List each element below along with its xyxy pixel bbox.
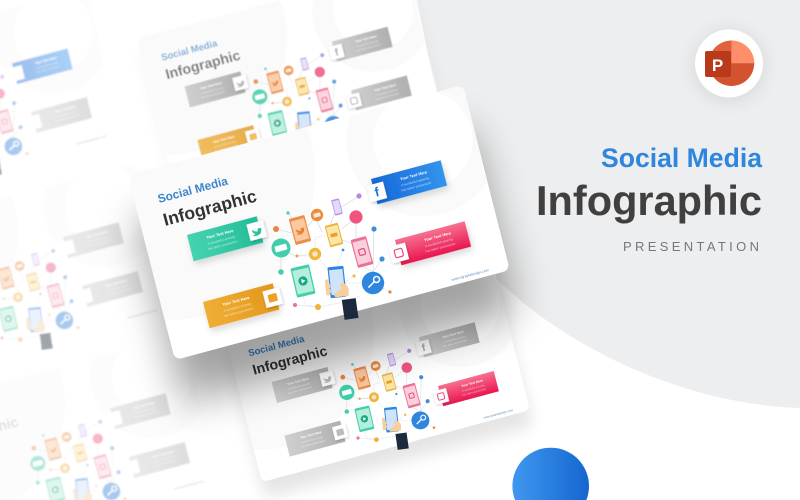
box: facebook: f <box>334 47 340 59</box>
box: twitter: Your Text Here <box>200 81 222 91</box>
box: instagram: A wonderful serenity <box>462 383 485 393</box>
box: instagram <box>387 221 471 267</box>
box: youtube: has taken possession <box>214 143 239 153</box>
box: instagram: has taken possession <box>375 91 400 101</box>
footer url: www.rgraphdesign.com <box>451 268 489 282</box>
box: instagram: has taken possession <box>462 387 487 397</box>
slide: faded top left: has taken possession <box>36 64 61 74</box>
box: facebook <box>327 27 393 63</box>
box: twitter <box>185 70 250 107</box>
box: youtube <box>284 420 349 457</box>
box: youtube: has taken possession <box>223 306 254 318</box>
box: facebook: has taken possession <box>443 338 468 348</box>
box: facebook: has taken possession <box>401 181 432 193</box>
slide: faded middle left: Your Text Here <box>105 278 128 288</box>
slide: faded middle left: has taken possession <box>87 238 112 248</box>
slide: faded bottom left: has taken possession <box>153 458 178 468</box>
title: social media: Social Media <box>601 143 762 173</box>
box: twitter: Your Text Here <box>287 376 309 386</box>
slide: faded bottom left: has taken possession <box>134 409 159 419</box>
slide: faded middle left: A wonderful serenity <box>106 283 129 293</box>
box: twitter <box>187 215 268 261</box>
box: instagram: Your Text Here <box>423 230 452 242</box>
box: youtube: has taken possession <box>301 438 326 449</box>
box: twitter: A wonderful serenity <box>207 235 236 246</box>
box: facebook: has taken possession <box>356 42 381 53</box>
box: instagram <box>345 75 412 112</box>
slide: faded top left: A wonderful serenity <box>55 109 78 119</box>
network of phones and icons <box>272 193 392 320</box>
box: instagram: A wonderful serenity <box>375 87 398 97</box>
slide: faded middle left: has taken possession <box>106 287 131 297</box>
box: instagram: Your Text Here <box>374 83 397 93</box>
slide: faded bottom left: A wonderful serenity <box>153 454 176 464</box>
box: youtube: Your Text Here <box>299 430 322 440</box>
main slide <box>25 30 510 360</box>
heading: Social Media <box>160 38 219 64</box>
box: instagram: A wonderful serenity <box>425 237 454 248</box>
box: twitter: A wonderful serenity <box>288 381 311 391</box>
slide: faded bottom left: A wonderful serenity <box>133 405 157 415</box>
slide: faded middle left: www.rgraphdesign.com <box>127 308 158 320</box>
box: facebook <box>414 322 480 359</box>
slide: faded bottom left: Your Text Here <box>152 449 175 459</box>
title: infographic: Infographic <box>536 177 762 224</box>
box: instagram: has taken possession <box>425 242 456 254</box>
heading: Infographic <box>161 186 259 230</box>
box: instagram <box>432 371 499 408</box>
box: youtube: A wonderful serenity <box>300 435 324 445</box>
slide: faded top left <box>0 0 123 208</box>
box: facebook: A wonderful serenity <box>401 176 430 187</box>
slide: lower <box>142 218 533 498</box>
box: youtube: A wonderful serenity <box>223 302 252 313</box>
box: facebook: A wonderful serenity <box>355 38 379 48</box>
slide shadow <box>141 0 446 198</box>
box: facebook <box>365 160 447 206</box>
box: youtube <box>203 282 284 328</box>
box: facebook: f <box>421 343 427 354</box>
box: youtube: Your Text Here <box>222 295 251 307</box>
box: youtube: A wonderful serenity <box>213 139 237 149</box>
slide: faded middle left <box>0 118 174 382</box>
heading: Infographic <box>164 47 242 82</box>
slide: faded bottom left <box>0 289 221 500</box>
box: twitter: has taken possession <box>207 239 238 251</box>
slide: faded bottom left: www.rgraphdesign.com <box>174 479 205 491</box>
box: facebook: Your Text Here <box>355 34 377 44</box>
box: instagram: Your Text Here <box>461 378 484 388</box>
slide shadow <box>228 278 533 498</box>
box: twitter <box>272 366 337 403</box>
box: facebook: Your Text Here <box>442 330 464 339</box>
box: twitter: Your Text Here <box>206 228 235 240</box>
heading: Social Media <box>156 174 230 206</box>
heading: Infographic <box>251 342 329 378</box>
slide: faded top left: Your Text Here <box>35 56 57 65</box>
box: youtube: Your Text Here <box>212 134 235 144</box>
box: twitter: has taken possession <box>201 89 226 99</box>
slide: faded middle left: A wonderful serenity <box>86 234 110 244</box>
slide: faded top left: A wonderful serenity <box>35 60 59 70</box>
slide: faded middle left: Your Text Here <box>86 230 108 239</box>
box: twitter: has taken possession <box>288 385 313 395</box>
slide: faded bottom left: Your Text Here <box>133 401 155 410</box>
decorative blue circle <box>512 448 589 500</box>
slide: faded top left: has taken possession <box>55 113 80 123</box>
slide: faded top left: Your Text Here <box>54 104 77 114</box>
subtitle: PRESENTATION <box>623 239 759 254</box>
background grey shape <box>417 0 800 408</box>
slide: faded top left: www.rgraphdesign.com <box>76 134 107 146</box>
box: youtube <box>197 124 262 161</box>
main slide shadow <box>136 128 518 403</box>
icon: powerpoint logo: P <box>712 56 723 75</box>
slide: lower: www.rgraphdesign.com <box>483 408 514 420</box>
heading: Social Media <box>247 334 306 359</box>
box: facebook: f <box>373 184 381 200</box>
box: facebook: A wonderful serenity <box>442 334 466 344</box>
icon: powerpoint logo <box>695 30 763 100</box>
box: facebook: Your Text Here <box>399 169 428 181</box>
slide: upper <box>55 0 446 198</box>
box: twitter: A wonderful serenity <box>201 85 224 95</box>
